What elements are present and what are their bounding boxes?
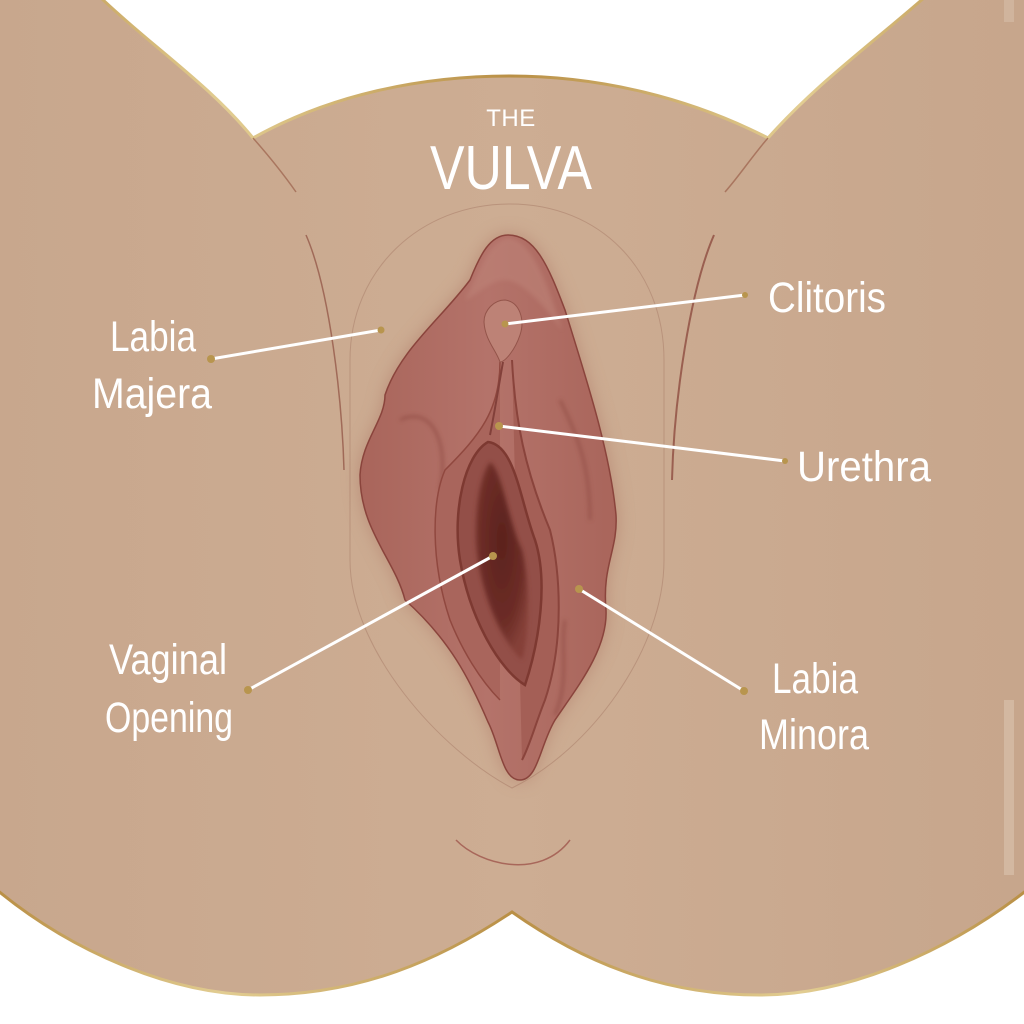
label: labia majora: Labia — [110, 313, 196, 361]
label: labia majora: Majera — [92, 370, 212, 418]
soft shadow halo — [360, 235, 616, 780]
label: vaginal opening: Vaginal — [109, 636, 227, 684]
title — [430, 105, 593, 203]
label: clitoris: Clitoris — [768, 274, 886, 322]
inner fold left — [435, 362, 500, 700]
label: labia minora — [759, 655, 869, 759]
title: VULVA — [430, 134, 593, 203]
labia majora — [360, 235, 616, 780]
anatomy illustration — [360, 235, 616, 780]
leader lines — [211, 295, 785, 691]
label: labia minora: Labia — [772, 655, 858, 703]
vaginal opening — [476, 462, 528, 660]
labia minora — [458, 442, 542, 685]
upper hood fold — [465, 238, 562, 330]
urethra — [490, 362, 503, 435]
label: urethra: Urethra — [797, 443, 931, 491]
label: labia majora — [92, 313, 212, 418]
soft folds — [400, 400, 590, 715]
label: vaginal opening: Opening — [105, 694, 233, 742]
outline around labia majora — [350, 204, 664, 788]
clitoris — [484, 300, 522, 362]
label: labia minora: Minora — [759, 711, 869, 759]
title: THE — [486, 105, 536, 132]
leader dots — [207, 292, 788, 695]
label: vaginal opening — [105, 636, 233, 742]
inner fold right — [512, 360, 559, 760]
